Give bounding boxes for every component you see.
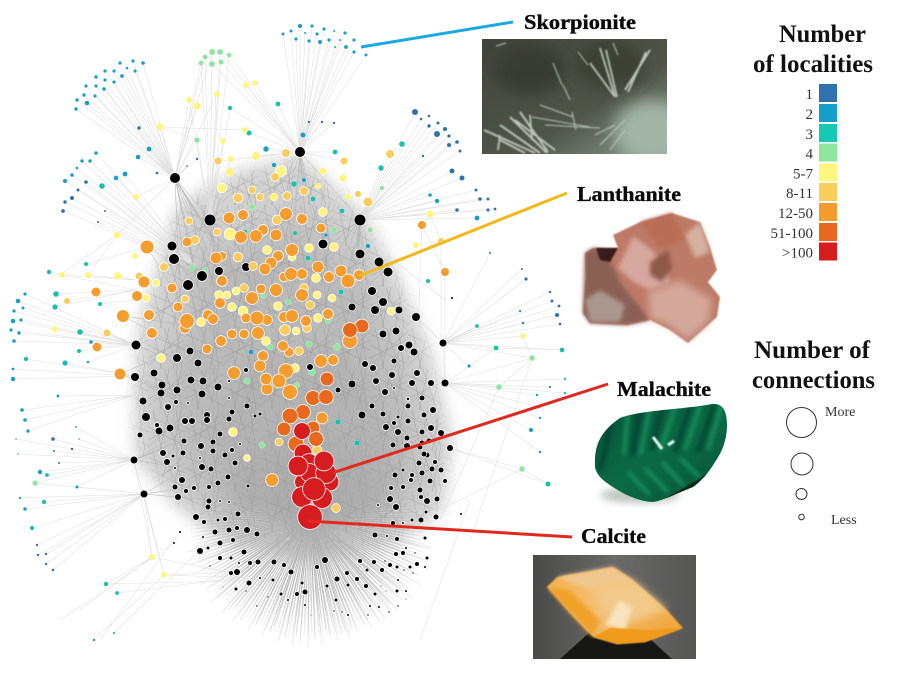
dense edge haze	[120, 140, 470, 570]
colour scale swatches	[819, 84, 837, 260]
leader line: Calcite	[308, 521, 572, 537]
nodes: 1 locality	[15, 109, 561, 571]
colour scale labels: 4	[806, 146, 814, 162]
legend heading: localities	[753, 21, 873, 78]
photo: Skorpionite	[482, 39, 667, 154]
colour scale labels: 3	[806, 127, 813, 143]
nodes: more than 100 localities	[288, 423, 338, 529]
nodes: 5-7 localities central	[142, 166, 394, 461]
label: Malachite: Malachite	[617, 377, 711, 401]
nodes: 51-100 localities	[278, 320, 368, 452]
nodes: 2 localities	[9, 24, 541, 641]
legend heading: connections: connections	[752, 367, 875, 394]
label: Lanthanite: Lanthanite	[577, 182, 681, 206]
colour scale labels: 1	[806, 87, 813, 103]
legend heading: connections	[752, 337, 875, 394]
legend heading: localities: of localities	[753, 51, 873, 78]
label: Calcite: Calcite	[581, 524, 646, 548]
nodes: 3 localities	[24, 102, 566, 595]
nodes: 4 localities	[32, 49, 535, 486]
legend heading: connections: Number of	[754, 337, 871, 364]
colour scale labels	[770, 87, 814, 262]
leader line: Lanthanite	[359, 193, 567, 276]
nodes: 5-7 localities	[52, 80, 526, 578]
hub bundles	[120, 152, 370, 500]
size scale circles	[786, 408, 816, 520]
photo: Malachite	[594, 404, 727, 508]
legend heading: localities: Number	[779, 21, 866, 48]
nodes: 12-50 localities	[92, 208, 449, 486]
leader line: Malachite	[332, 384, 608, 473]
colour scale labels: >100	[782, 246, 813, 262]
label: Less: Less	[831, 513, 857, 528]
colour scale labels: 8-11	[786, 186, 813, 202]
leader line: Skorpionite	[361, 22, 513, 47]
label: Skorpionite: Skorpionite	[524, 10, 636, 34]
colour scale labels: 51-100	[770, 226, 813, 242]
label: More: More	[825, 405, 855, 420]
colour scale labels: 12-50	[778, 206, 813, 222]
nodes: 8-11 localities	[64, 149, 444, 512]
nodes: black hubs and unclassified minerals	[130, 147, 497, 616]
photo: Lanthanite	[583, 213, 720, 343]
peripheral edges	[11, 26, 565, 640]
network diagram	[11, 26, 565, 648]
calcite edge fan	[188, 455, 430, 648]
colour scale labels: 5-7	[793, 166, 813, 182]
legend: number of connections	[752, 337, 875, 528]
colour scale labels: 2	[806, 107, 813, 123]
legend: number of localities	[753, 21, 873, 262]
photo: Calcite	[533, 555, 696, 659]
